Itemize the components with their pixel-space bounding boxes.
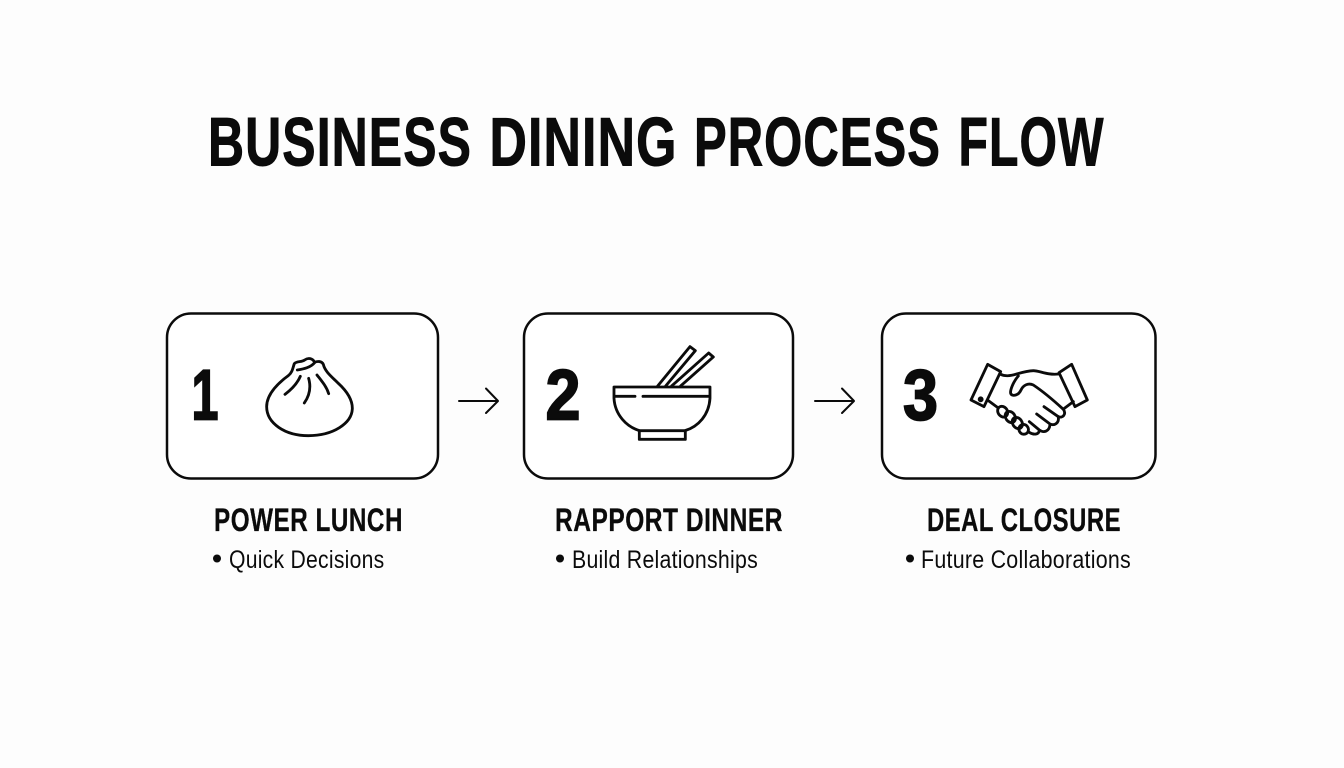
label: power lunch <box>213 502 403 574</box>
text: build relationships: Build Relationships <box>572 546 758 574</box>
title <box>208 104 1104 180</box>
label: deal closure: DEAL CLOSURE <box>927 502 1121 538</box>
card outline 3 <box>882 314 1156 478</box>
label: deal closure <box>906 502 1131 574</box>
title: DINING <box>490 104 678 180</box>
number 1: 1 <box>192 356 218 436</box>
title: FLOW <box>958 104 1104 180</box>
arrow: step 2 to step 3 <box>815 388 854 413</box>
icon: bowl with chopsticks <box>614 347 713 439</box>
bullet 1 <box>213 554 221 562</box>
bullet 2 <box>556 554 564 562</box>
title: BUSINESS <box>208 104 472 180</box>
panel: step 2 rapport dinner <box>524 314 793 478</box>
bullet 3 <box>906 554 914 562</box>
panel: step 3 deal closure <box>882 314 1156 478</box>
icon: soup dumpling <box>267 359 352 436</box>
card outline 1 <box>167 314 438 478</box>
label: rapport dinner: RAPPORT DINNER <box>555 502 783 538</box>
panel: step 1 power lunch <box>167 314 438 478</box>
label: rapport dinner <box>555 502 783 574</box>
number 3: 3 <box>903 356 938 436</box>
title: PROCESS <box>694 104 941 180</box>
arrow: step 1 to step 2 <box>459 388 498 413</box>
number 2: 2 <box>546 356 580 436</box>
icon: handshake <box>971 364 1087 436</box>
text: future collaborations: Future Collaborations <box>921 546 1131 574</box>
text: quick decisions: Quick Decisions <box>229 546 384 574</box>
card outline 2 <box>524 314 793 478</box>
label: power lunch: POWER LUNCH <box>214 502 403 538</box>
